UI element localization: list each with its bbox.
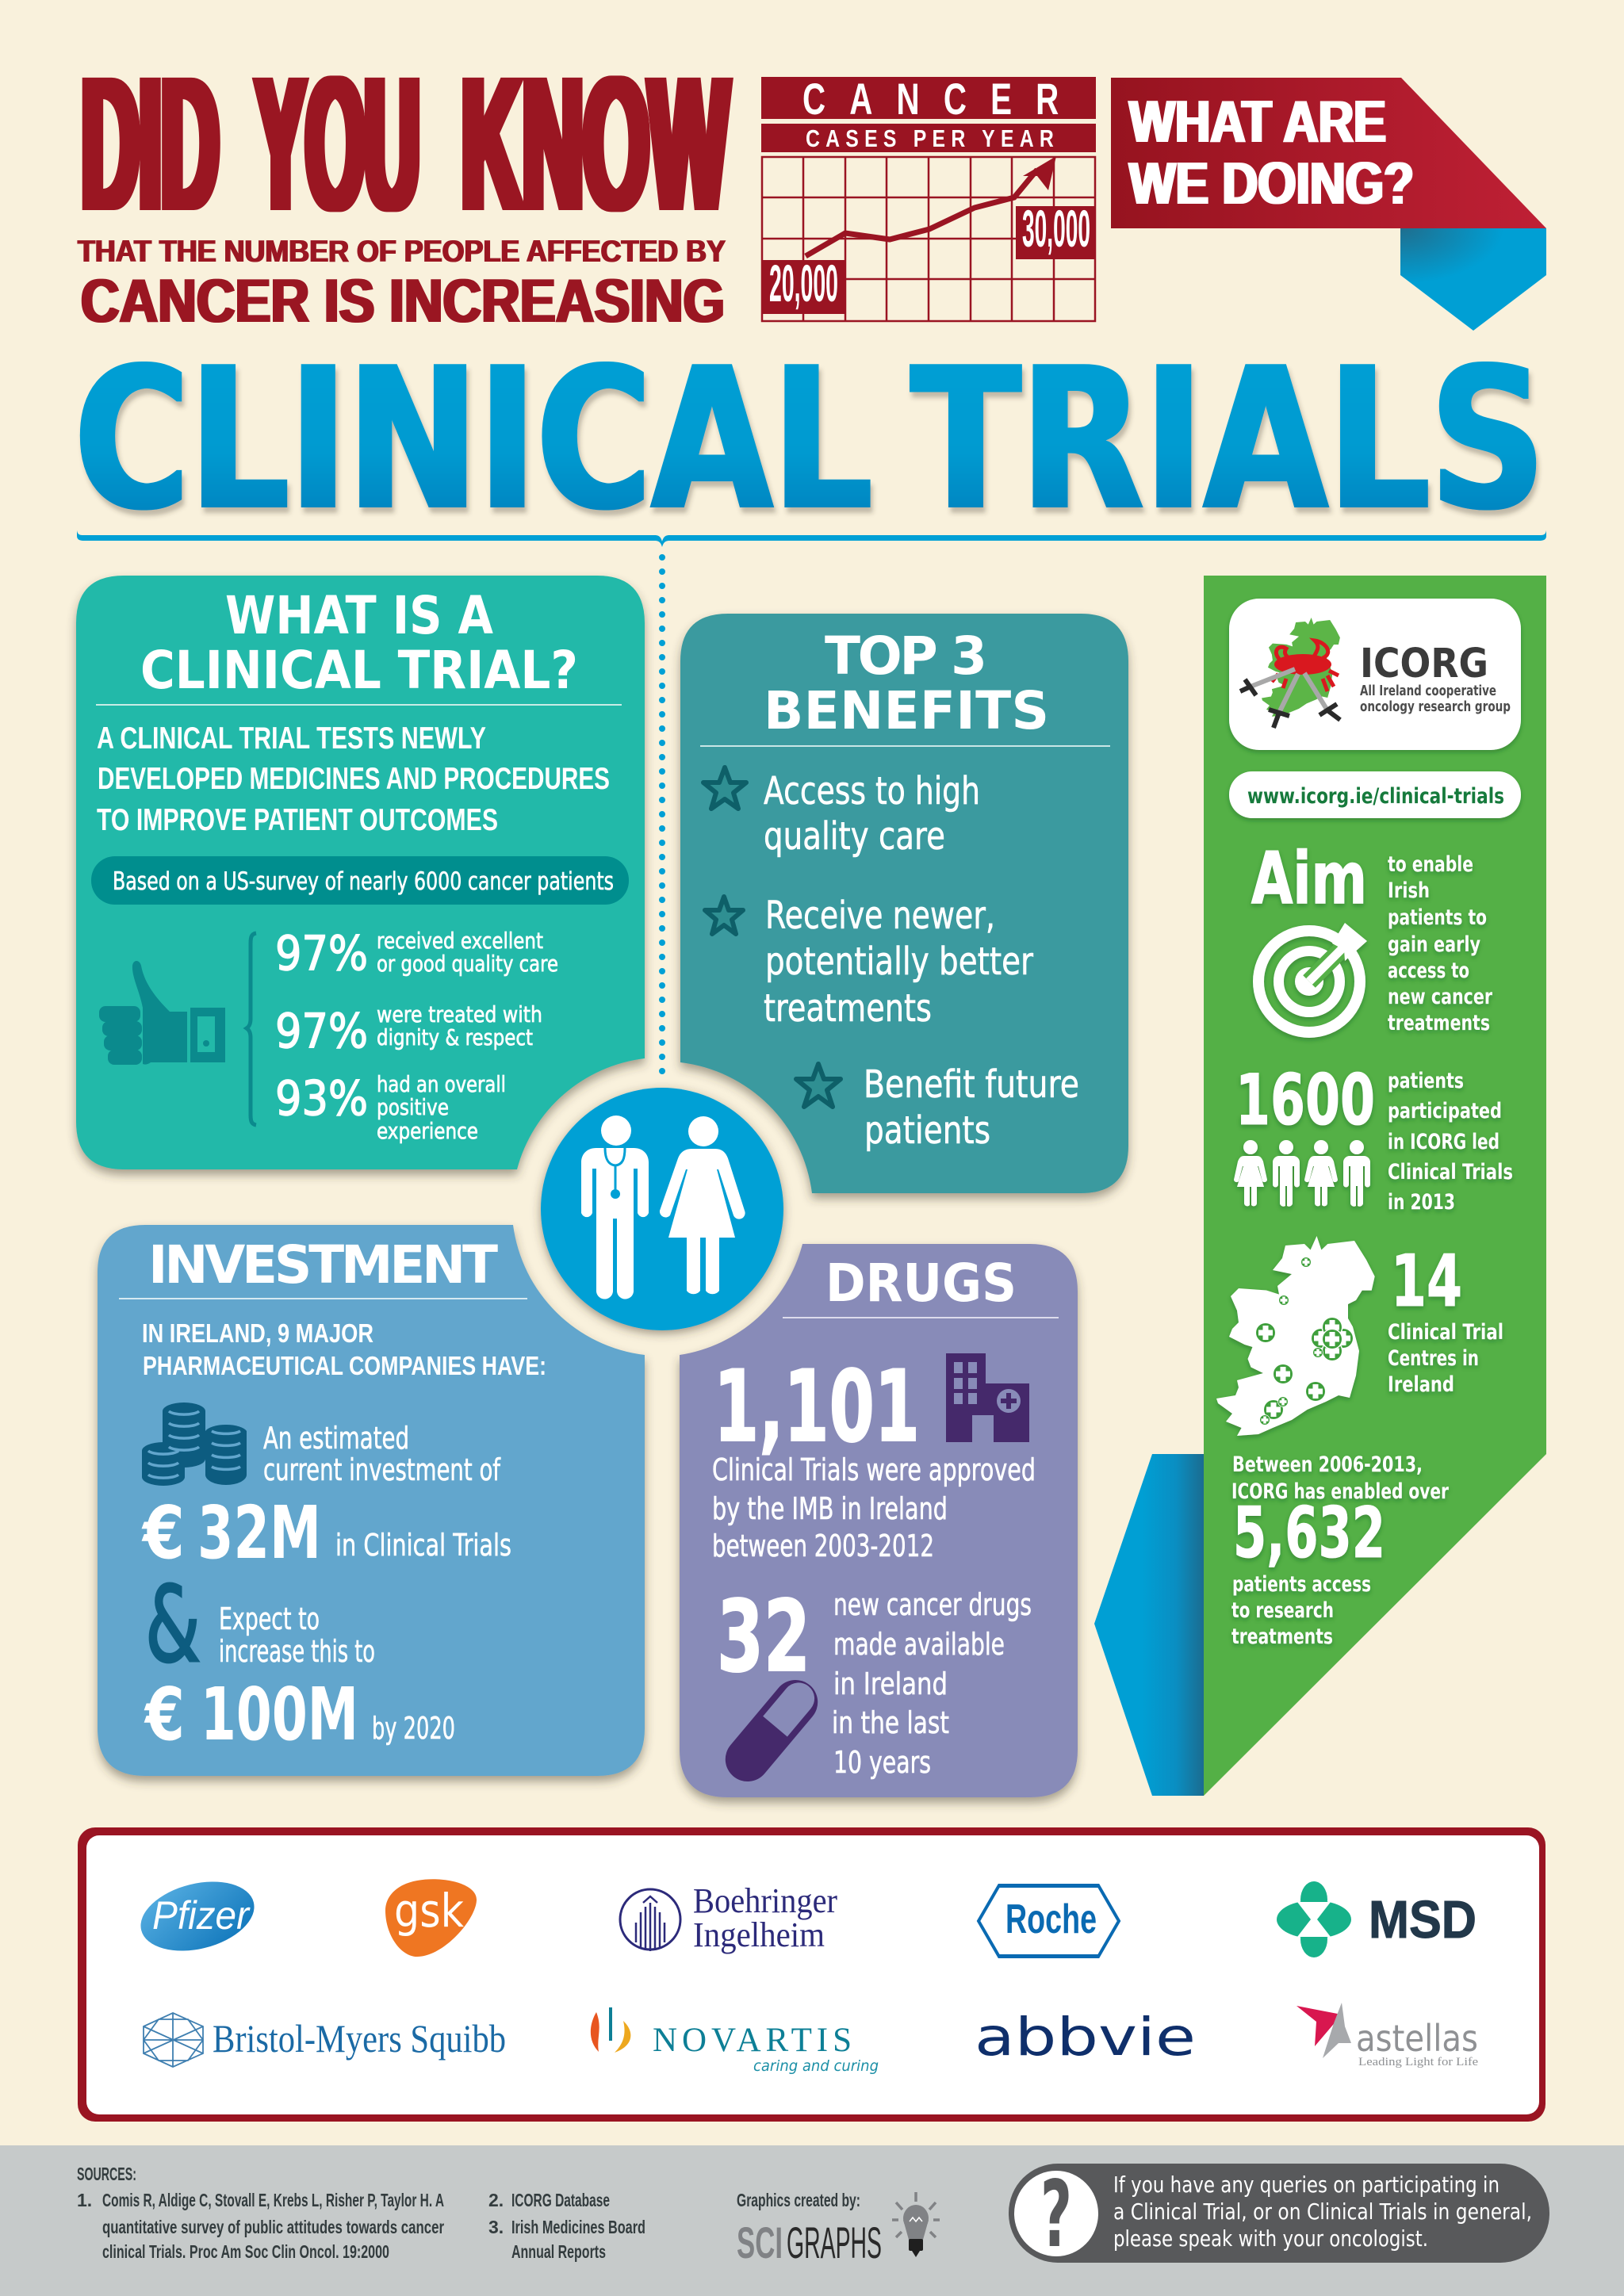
figure: 32M: 32M <box>197 1490 321 1575</box>
benefit 2: treatments <box>764 986 932 1031</box>
chart: cancer cases per year <box>761 75 1096 321</box>
text: new cancer drugs: 10 years <box>833 1745 931 1780</box>
title bracket with dotted connector <box>77 530 1546 1075</box>
text: patients access: patients access <box>1232 1572 1371 1597</box>
text: patients participated: in 2013 <box>1388 1190 1455 1215</box>
logo: pfizer <box>133 1871 262 1961</box>
text: patients participated: patients <box>1388 1069 1464 1093</box>
figure: 5,632: 5,632 <box>1233 1492 1385 1574</box>
figure: 32M: in Clinical Trials <box>335 1528 511 1563</box>
footer: query callout: If you have any queries on participating in <box>1113 2172 1500 2198</box>
figure: 100M: € <box>144 1672 185 1757</box>
text: estimated current investment <box>263 1421 501 1487</box>
text: aim description: Irish <box>1388 878 1430 903</box>
panel heading: WHAT IS A <box>225 585 493 646</box>
stat: 97% quality care <box>275 926 558 982</box>
stat: 97% dignity: 97% <box>275 1004 368 1059</box>
subheading: number of people affected: THAT THE NUMBER OF PEOPLE AFFECTED BY <box>78 235 726 269</box>
benefit 1: Access to high <box>764 769 980 813</box>
figure: 32: 32 <box>717 1580 810 1694</box>
text: clinical trial centres: Clinical Trial <box>1388 1320 1503 1345</box>
figure: patient <box>660 1116 745 1294</box>
icon: target <box>1258 923 1367 1032</box>
stat: 93% positive: positive <box>377 1094 449 1120</box>
stat: 97% dignity: were treated with <box>377 1001 542 1027</box>
stat: 97% dignity <box>275 1001 542 1059</box>
label: 20,000 <box>761 254 846 314</box>
survey pill <box>91 856 629 905</box>
text: estimated current investment: current investment of <box>263 1452 501 1487</box>
logo: icorg: ICORG <box>1360 641 1488 687</box>
chart header: cancer: CANCER <box>802 75 1059 124</box>
chart line: rising trend <box>806 156 1056 256</box>
logo: icorg: All Ireland cooperative <box>1360 683 1496 699</box>
text: 30,000 <box>1022 199 1090 258</box>
footer band <box>0 2145 1624 2296</box>
figure: 32M <box>141 1490 511 1575</box>
logo: gsk <box>385 1879 477 1957</box>
definition text: TO IMPROVE PATIENT OUTCOMES <box>97 803 498 837</box>
text: aim description: to enable <box>1388 852 1473 877</box>
panel heading: CLINICAL TRIAL? <box>140 640 578 701</box>
footer: query callout <box>1009 2161 1549 2268</box>
figure: 1600: 1600 <box>1235 1059 1375 1141</box>
survey pill: Based on a US-survey of nearly 6000 cancer patients <box>113 867 614 896</box>
text: new cancer drugs: in Ireland <box>833 1667 948 1701</box>
footer: sources: SOURCES: <box>77 2164 136 2184</box>
logo: roche: Roche <box>1005 1896 1097 1942</box>
benefit 3: patients <box>864 1108 990 1153</box>
footer: scigraphs credit: SCI <box>737 2218 783 2267</box>
logo: icorg <box>1229 599 1521 750</box>
label: 30,000 <box>1016 199 1096 259</box>
icon: ampersand: & <box>145 1564 201 1686</box>
footer: sources: Comis R, Aldige C, Stovall E, Krebs L, Risher P, Taylor H. A <box>102 2190 444 2210</box>
text: new cancer drugs: made available <box>833 1627 1005 1662</box>
stat: 93% positive: had an overall <box>377 1071 506 1097</box>
benefit 3: Benefit future <box>864 1062 1079 1107</box>
ribbon: what are we doing <box>1111 78 1546 228</box>
panel: what is a clinical trial <box>76 576 645 1169</box>
panel: investment <box>98 1225 645 1776</box>
logo: astellas: Leading Light for Life <box>1358 2056 1478 2068</box>
logo: msd <box>1277 1881 1477 1957</box>
stat: 97% dignity: dignity & respect <box>377 1024 533 1050</box>
benefit 2: Receive newer, <box>765 894 995 938</box>
url pill: www.icorg.ie/clinical-trials <box>1247 784 1504 809</box>
icon: light bulb <box>892 2192 940 2257</box>
text: new cancer drugs: in the last <box>832 1705 949 1740</box>
url pill <box>1229 771 1521 818</box>
text: patients participated: Clinical Trials <box>1388 1160 1513 1184</box>
ribbon: what are we doing: WE DOING? <box>1129 150 1414 216</box>
icon: doctor and patient circle <box>541 1088 783 1330</box>
figure: 32M: € <box>141 1490 185 1575</box>
text: between 2006-2013: ICORG has enabled over <box>1231 1479 1450 1504</box>
text: trials approved: Clinical Trials were approved <box>712 1452 1036 1487</box>
main title: clinical trials <box>75 326 1545 554</box>
logo: novartis: caring and curing <box>753 2057 879 2075</box>
text: aim description: access to <box>1388 959 1469 983</box>
text: aim description <box>1388 852 1493 1035</box>
text: aim description: treatments <box>1388 1011 1490 1035</box>
icon: question mark: ? <box>1040 2161 1072 2268</box>
text: expect to increase <box>219 1601 375 1669</box>
text: between 2006-2013: Between 2006-2013, <box>1232 1452 1423 1477</box>
chart subheader: cases per year: CASES PER YEAR <box>806 124 1054 152</box>
icon: four people <box>1234 1140 1370 1207</box>
text: patients participated: participated <box>1388 1099 1502 1123</box>
panel heading: INVESTMENT <box>148 1234 498 1295</box>
text: expect to increase: Expect to <box>219 1601 320 1636</box>
definition text <box>97 721 610 837</box>
text: trials approved: between 2003-2012 <box>712 1529 934 1563</box>
text: aim description: gain early <box>1388 932 1480 957</box>
text: clinical trial centres: Centres in <box>1388 1346 1479 1371</box>
footer: sources <box>77 2164 645 2262</box>
footer: sources: clinical Trials. Proc Am Soc Clin Oncol. 19:2000 <box>102 2241 389 2262</box>
footer: scigraphs credit: GRAPHS <box>787 2218 882 2267</box>
text: KNOW <box>462 36 729 251</box>
icon: coin stacks <box>142 1402 247 1486</box>
logo: roche <box>979 1884 1119 1958</box>
stat: 97% quality care: 97% <box>275 926 368 982</box>
logo: astellas <box>1297 2003 1478 2068</box>
text: aim description: new cancer <box>1388 985 1493 1009</box>
text: clinical trial centres <box>1388 1320 1503 1397</box>
intro text: IN IRELAND, 9 MAJOR <box>142 1318 373 1348</box>
text: patients participated <box>1388 1069 1513 1215</box>
figure: 1,101: 1,101 <box>714 1350 920 1464</box>
brace <box>247 933 256 1125</box>
footer: sources: Irish Medicines Board <box>511 2217 645 2237</box>
benefit 1 <box>703 767 980 859</box>
footer: sources: ICORG Database <box>511 2190 610 2210</box>
definition text: DEVELOPED MEDICINES AND PROCEDURES <box>98 762 610 796</box>
icon: capsule <box>716 1671 827 1790</box>
footer: sources: quantitative survey of public attitudes towards cancer <box>102 2217 444 2237</box>
benefit 3 <box>796 1062 1079 1153</box>
logo: boehringer ingelheim: Boehringer <box>693 1881 837 1920</box>
logo: bristol-myers squibb: Bristol-Myers Squibb <box>213 2016 506 2061</box>
logo: novartis <box>591 2007 879 2075</box>
figure: 100M: by 2020 <box>372 1711 455 1746</box>
panel heading: TOP 3 <box>825 626 987 687</box>
figure: 14: 14 <box>1391 1240 1462 1323</box>
panel heading <box>140 585 578 701</box>
figure: doctor <box>581 1115 649 1299</box>
main title: clinical trials: CLINICAL <box>75 326 872 554</box>
footer: scigraphs credit: Graphics created by: <box>737 2190 860 2210</box>
logo: pfizer: Pfizer <box>152 1893 251 1938</box>
subheading: cancer is increasing: CANCER IS INCREASING <box>81 266 725 335</box>
icon: thumbs up <box>99 961 225 1065</box>
panel: drugs <box>680 1244 1078 1797</box>
aim heading: Aim <box>1251 837 1367 920</box>
heading: did you know: YOU <box>255 36 419 251</box>
logo: boehringer ingelheim <box>620 1881 837 1954</box>
figure: 100M: 100M <box>201 1672 358 1757</box>
panel: pharmaceutical logos <box>78 1827 1545 2122</box>
map: ireland with centres <box>1216 1236 1375 1436</box>
intro text <box>142 1318 546 1380</box>
text: clinical trial centres: Ireland <box>1388 1372 1454 1397</box>
text: new cancer drugs: new cancer drugs <box>833 1587 1032 1622</box>
icon: question mark <box>1014 2161 1098 2268</box>
intro text: PHARMACEUTICAL COMPANIES HAVE: <box>143 1351 546 1380</box>
logo: gsk: gsk <box>394 1884 464 1938</box>
footer: scigraphs credit <box>737 2190 940 2267</box>
panel heading <box>764 626 1049 741</box>
stat: 97% quality care: received excellent <box>377 928 543 954</box>
footer: query callout: a Clinical Trial, or on Clinical Trials in general, <box>1113 2198 1532 2225</box>
text: aim description: patients to <box>1388 905 1487 930</box>
text: between 2006-2013 <box>1231 1452 1450 1504</box>
footer: sources: 1. <box>77 2190 92 2210</box>
text: trials approved <box>712 1452 1036 1563</box>
logo: abbvie: abbvie <box>975 2007 1196 2068</box>
benefit 2 <box>705 894 1033 1031</box>
stat: 93% positive: experience <box>377 1118 478 1144</box>
text: patients access <box>1231 1572 1371 1649</box>
chart: cancer cases per year: 20,000 <box>769 254 838 312</box>
panel: icorg <box>1204 576 1546 1796</box>
logo: icorg: oncology research group <box>1360 698 1511 715</box>
heading: did you know <box>82 36 729 251</box>
panel: top 3 benefits <box>680 614 1128 1193</box>
text: trials approved: by the IMB in Ireland <box>712 1491 948 1526</box>
text: patients access: to research <box>1231 1598 1334 1623</box>
text: new cancer drugs <box>832 1587 1032 1780</box>
ribbon: what are we doing: WHAT ARE <box>1129 88 1386 155</box>
stat: 93% positive: 93% <box>275 1071 368 1127</box>
text: patients access: treatments <box>1231 1624 1333 1649</box>
footer: query callout: please speak with your oncologist. <box>1113 2225 1428 2252</box>
text: expect to increase: increase this to <box>219 1634 375 1669</box>
stat: 97% quality care: or good quality care <box>377 951 558 977</box>
text: estimated current investment: An estimated <box>263 1421 409 1456</box>
text: patients participated: in ICORG led <box>1388 1130 1500 1154</box>
footer: sources: 3. <box>488 2217 504 2237</box>
panel heading: DRUGS <box>825 1253 1017 1314</box>
logo: bristol-myers squibb <box>144 2013 506 2067</box>
ribbon: blue fold lower <box>1094 1454 1204 1796</box>
logo: novartis: NOVARTIS <box>653 2022 852 2059</box>
logo: astellas: astellas <box>1356 2017 1478 2060</box>
logo: msd: MSD <box>1369 1890 1477 1950</box>
benefit 1: quality care <box>764 814 945 859</box>
benefit 2: potentially better <box>765 939 1033 984</box>
logo: boehringer ingelheim: Ingelheim <box>693 1915 825 1954</box>
footer: sources: Annual Reports <box>511 2241 606 2262</box>
icon: hospital <box>946 1353 1029 1442</box>
heading: did you know: DID <box>82 36 219 251</box>
stat: 93% positive <box>275 1071 506 1144</box>
definition text: A CLINICAL TRIAL TESTS NEWLY <box>97 721 486 756</box>
footer: sources: 2. <box>488 2190 504 2210</box>
panel heading: BENEFITS <box>764 680 1049 741</box>
ribbon: blue fold <box>1400 228 1546 331</box>
